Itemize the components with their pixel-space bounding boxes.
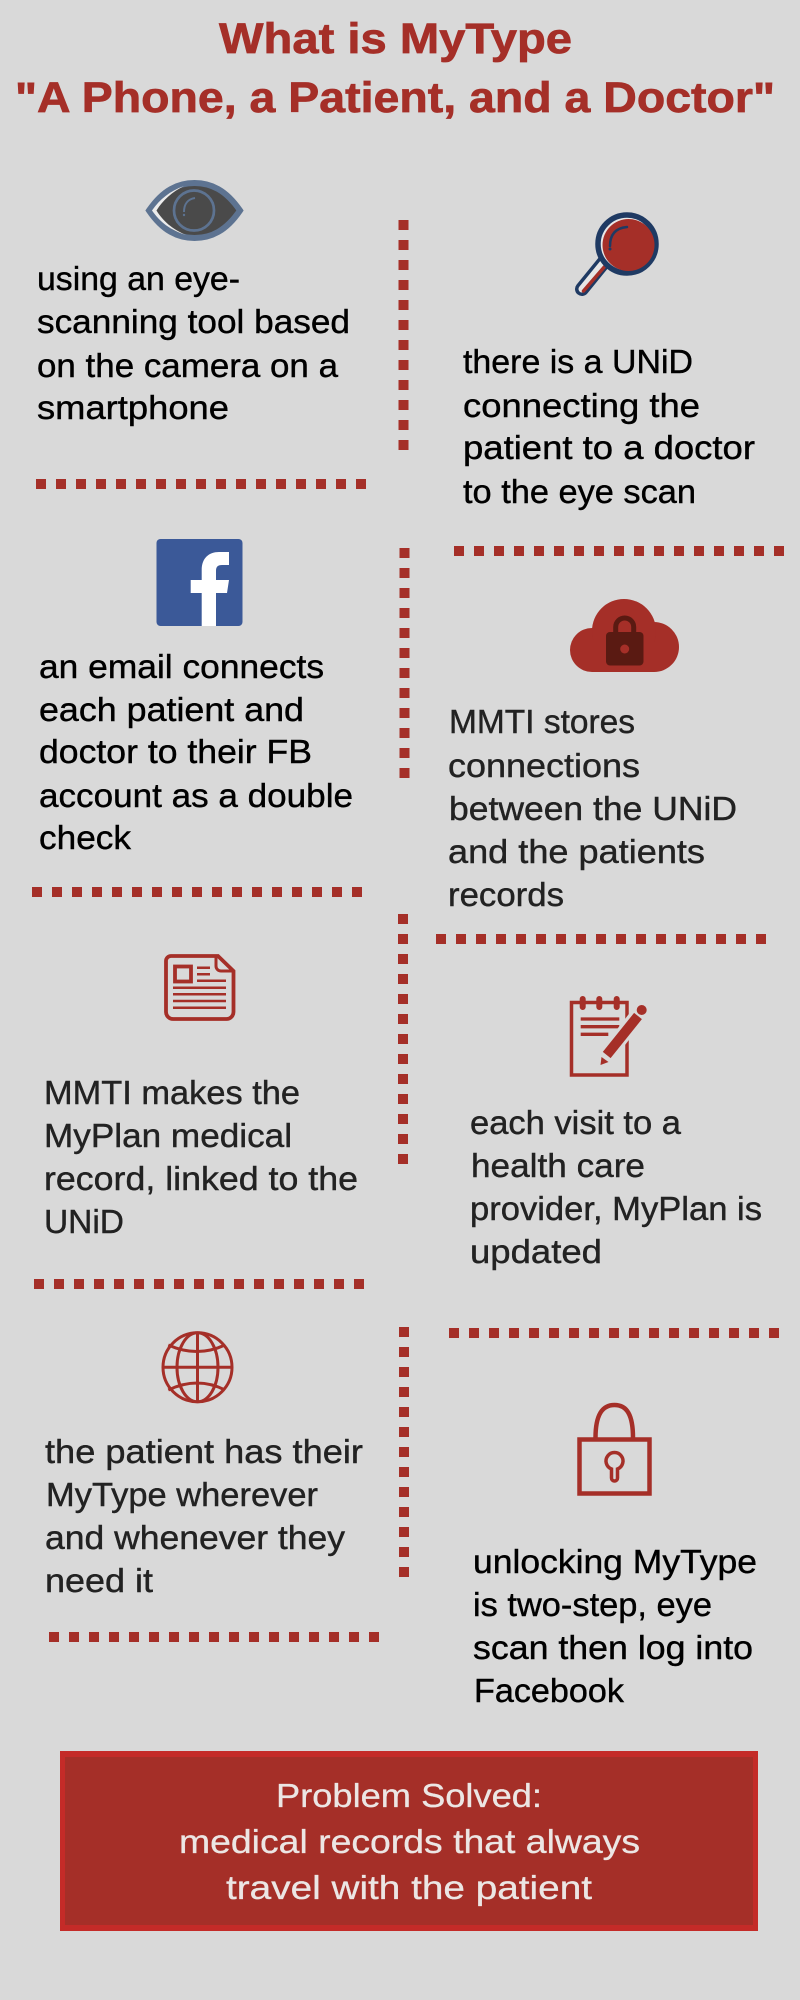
panel: secure storage	[448, 599, 737, 913]
text: Facebook check: each patient and	[39, 691, 304, 728]
text: access anywhere: the patient has their	[45, 1433, 363, 1470]
panel: UNiD	[463, 215, 755, 510]
text: UNiD: connecting the	[463, 387, 700, 424]
text: UNiD: patient to a doctor	[463, 429, 755, 466]
text: visit updates: health care	[471, 1147, 645, 1184]
text: Facebook check: doctor to their FB	[39, 733, 312, 770]
text: two-step unlock: Facebook	[474, 1672, 625, 1709]
icon: padlock	[580, 1405, 650, 1494]
text: secure storage	[448, 703, 737, 913]
text: MyPlan record: MyPlan medical	[44, 1117, 292, 1154]
icon: document	[166, 956, 234, 1019]
callout: problem solved: travel with the patient	[226, 1869, 592, 1906]
icon: notepad and pencil	[572, 999, 647, 1075]
icon: eye	[149, 183, 240, 238]
text: two-step unlock: unlocking MyType	[473, 1543, 757, 1580]
panel: access anywhere	[45, 1333, 363, 1599]
text: secure storage: and the patients	[448, 833, 705, 870]
text: eye scan: smartphone	[37, 389, 229, 426]
text: two-step unlock	[473, 1543, 757, 1709]
text: Facebook check	[39, 648, 353, 856]
text: Facebook check: an email connects	[39, 648, 324, 685]
panel: visit updates	[470, 999, 762, 1270]
title	[15, 15, 775, 122]
icon: Facebook	[156, 539, 242, 626]
text: two-step unlock: is two-step, eye	[473, 1586, 712, 1623]
text: visit updates: provider, MyPlan is	[470, 1190, 762, 1227]
callout: problem solved: medical records that always	[179, 1823, 640, 1860]
text: secure storage: connections	[448, 747, 640, 784]
text: UNiD: there is a UNiD	[463, 343, 693, 380]
callout: problem solved	[60, 1751, 758, 1931]
text: visit updates: each visit to a	[470, 1104, 682, 1141]
text: MyPlan record: MMTI makes the	[44, 1074, 300, 1111]
title: What is MyType	[219, 15, 572, 63]
text: access anywhere: need it	[45, 1562, 153, 1599]
text: MyPlan record	[44, 1074, 358, 1240]
text: secure storage: records	[448, 876, 564, 913]
text: eye scan: on the camera on a	[37, 347, 339, 384]
text: Facebook check: account as a double	[39, 777, 353, 814]
panel: MyPlan record	[44, 956, 358, 1240]
text: eye scan	[37, 260, 350, 426]
icon: cloud with padlock	[570, 599, 679, 672]
text: two-step unlock: scan then log into	[473, 1629, 753, 1666]
callout: problem solved: Problem Solved:	[276, 1777, 542, 1814]
text: visit updates: updated	[470, 1233, 602, 1270]
icon: globe	[163, 1333, 232, 1402]
text: Facebook check: check	[39, 819, 132, 856]
text: access anywhere: and whenever they	[45, 1519, 346, 1556]
panel: eye scan	[37, 183, 350, 426]
text: eye scan: scanning tool based	[37, 303, 350, 340]
text: access anywhere: MyType wherever	[46, 1476, 318, 1513]
text: UNiD: to the eye scan	[463, 473, 696, 510]
panel: Facebook check	[39, 539, 353, 856]
text: secure storage: MMTI stores	[449, 703, 635, 740]
text: visit updates	[470, 1104, 762, 1270]
text: MyPlan record: UNiD	[44, 1203, 124, 1240]
text: access anywhere	[45, 1433, 363, 1599]
text: UNiD	[463, 343, 755, 510]
text: eye scan: using an eye-	[37, 260, 240, 297]
text: MyPlan record: record, linked to the	[44, 1160, 358, 1197]
text: secure storage: between the UNiD	[449, 790, 737, 827]
icon: magnifying glass	[582, 215, 656, 291]
title: "A Phone, a Patient, and a Doctor"	[15, 74, 775, 122]
panel: two-step unlock	[473, 1405, 757, 1709]
